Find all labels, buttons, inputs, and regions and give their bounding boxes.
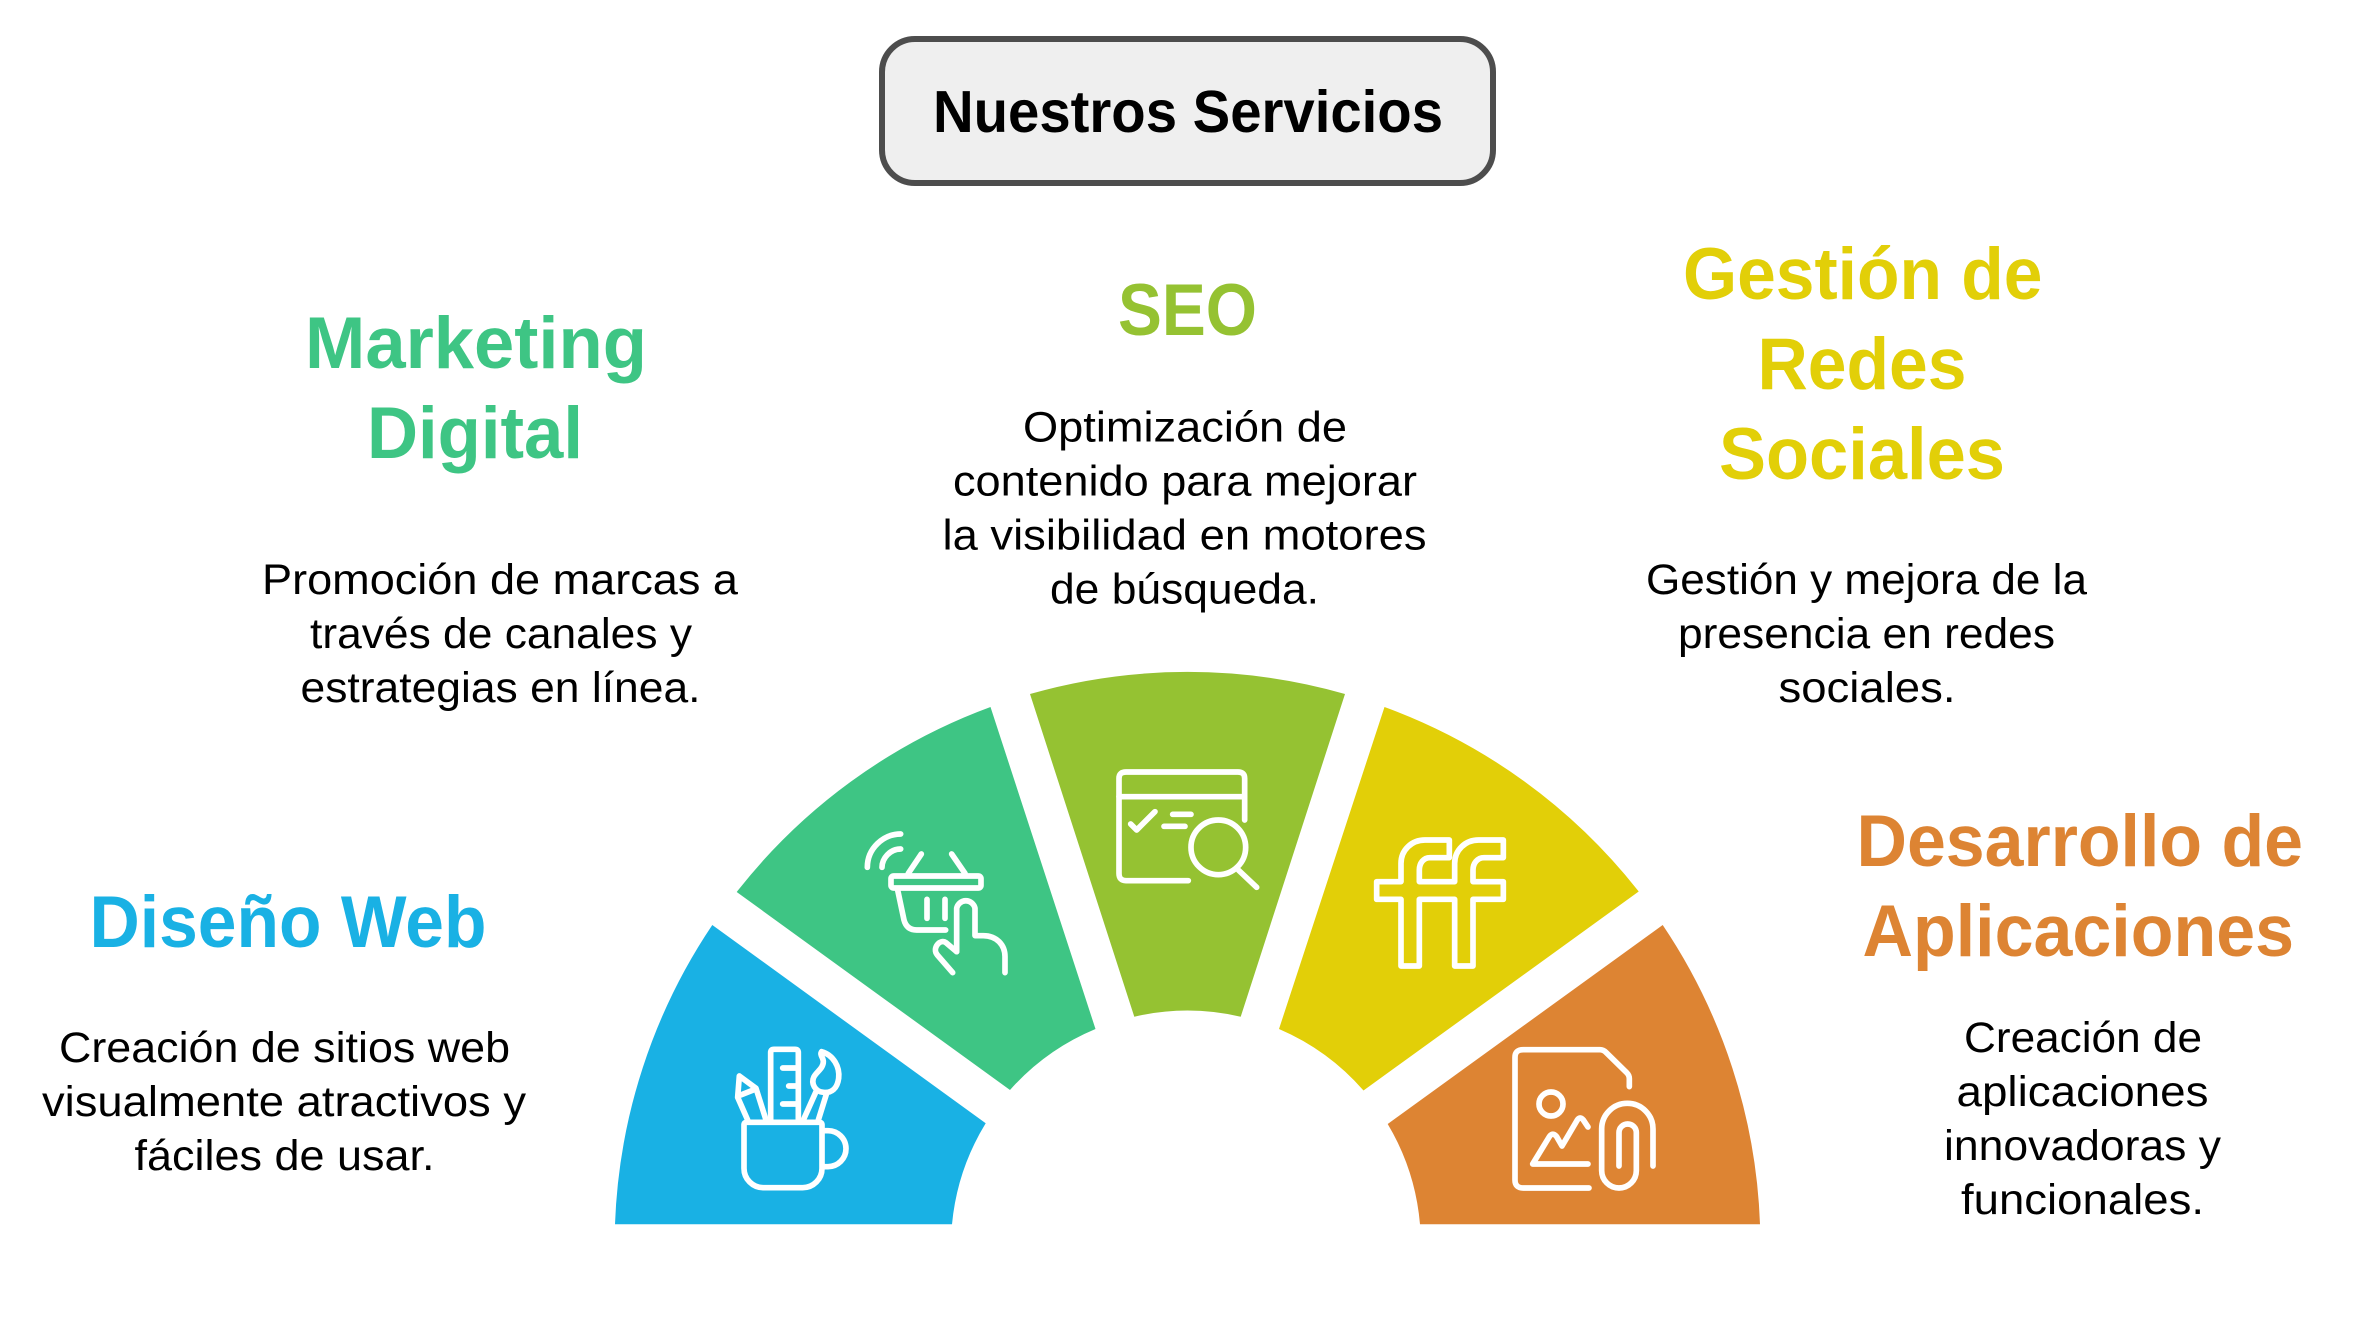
description: SEO: la visibilidad en motores [942, 512, 1426, 560]
icon: browser window with magnifier [1119, 772, 1257, 887]
heading: Marketing Digital [305, 303, 647, 474]
panel: Gestión de Redes Sociales text [1646, 234, 2087, 712]
description: Marketing Digital [262, 557, 738, 712]
heading: Gestión de Redes Sociales: Sociales [1719, 414, 2005, 495]
description: Diseño Web: fáciles de usar. [134, 1133, 434, 1180]
heading: Desarrollo de Aplicaciones: Desarrollo de [1856, 801, 2303, 882]
heading: Marketing Digital: Digital [367, 393, 583, 474]
description: Marketing Digital: estrategias en línea. [300, 665, 700, 712]
segment: Gestión de Redes Sociales (yellow) [1279, 707, 1639, 1090]
description: Marketing Digital: través de canales y [310, 611, 693, 658]
description: SEO: contenido para mejorar [953, 459, 1417, 506]
description: Gestión de Redes Sociales: presencia en redes [1678, 611, 2055, 658]
description: Desarrollo de Aplicaciones: innovadoras y [1944, 1123, 2222, 1170]
description: Desarrollo de Aplicaciones [1944, 1015, 2222, 1224]
heading: Gestión de Redes Sociales [1683, 234, 2042, 495]
panel: Desarrollo de Aplicaciones text [1856, 801, 2303, 1224]
description: SEO: de búsqueda. [1050, 566, 1319, 614]
description: Gestión de Redes Sociales [1646, 557, 2087, 712]
heading: Gestión de Redes Sociales: Gestión de [1683, 234, 2042, 315]
heading: SEO: SEO [1118, 270, 1257, 351]
heading: Marketing Digital: Marketing [305, 303, 647, 384]
heading: Diseño Web: Diseño Web [90, 882, 486, 963]
description: Desarrollo de Aplicaciones: aplicaciones [1956, 1069, 2208, 1116]
title box: Nuestros Servicios [933, 79, 1443, 145]
semicircle chart [615, 672, 1760, 1224]
heading: Gestión de Redes Sociales: Redes [1758, 324, 1966, 405]
description: Desarrollo de Aplicaciones: Creación de [1964, 1015, 2202, 1062]
panel: Diseño Web text [42, 882, 527, 1180]
heading: Desarrollo de Aplicaciones [1856, 801, 2303, 972]
description: Gestión de Redes Sociales: Gestión y mejora de la [1646, 557, 2087, 604]
description: Diseño Web [42, 1025, 527, 1180]
icon: document with image and paperclip [1515, 1050, 1653, 1188]
description: Gestión de Redes Sociales: sociales. [1778, 665, 1956, 712]
segment: Desarrollo de Aplicaciones (orange) [1388, 925, 1760, 1224]
description: SEO: Optimización de [1023, 405, 1347, 452]
icon: shopping basket with tapping hand [867, 834, 1005, 973]
title box [882, 39, 1493, 183]
icon: double f social logo [1377, 840, 1503, 966]
description: Diseño Web: visualmente atractivos y [42, 1079, 527, 1126]
segment: Diseño Web (blue) [615, 925, 986, 1224]
icon: pencil cup with ruler and brush [738, 1049, 846, 1188]
panel: Marketing Digital text [262, 303, 738, 712]
segment: SEO (olive) [1030, 672, 1345, 1017]
segment: Marketing Digital (green) [737, 707, 1096, 1090]
description: Desarrollo de Aplicaciones: funcionales. [1961, 1177, 2204, 1224]
heading: Desarrollo de Aplicaciones: Aplicaciones [1862, 891, 2294, 972]
description: SEO [942, 405, 1426, 614]
description: Diseño Web: Creación de sitios web [59, 1025, 510, 1072]
panel: SEO text [942, 270, 1426, 614]
description: Marketing Digital: Promoción de marcas a [262, 557, 738, 604]
